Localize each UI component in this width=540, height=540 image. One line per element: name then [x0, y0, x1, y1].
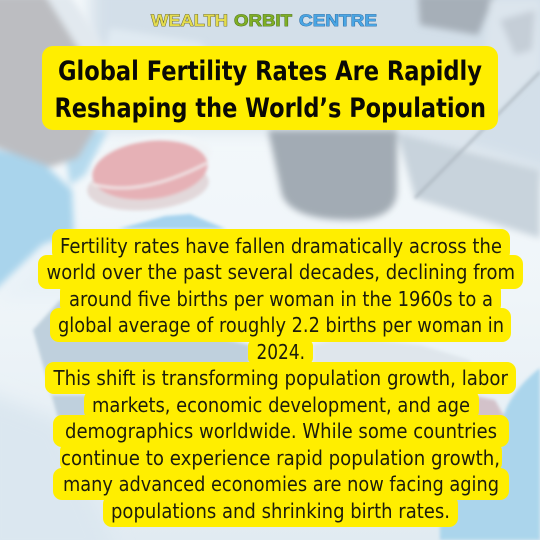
paragraph 2: populations and shrinking birth rates.: [111, 499, 450, 523]
paragraph 1: [46, 234, 515, 364]
paragraph 2: [53, 366, 509, 523]
paragraph 2: markets, economic development, and age: [92, 393, 470, 417]
paragraph 1: 2024.: [256, 340, 305, 364]
logo: Wealth Orbit Centre: [151, 11, 377, 30]
body text panel: [38, 229, 523, 527]
logo word: Centre: CENTRE: [299, 11, 377, 30]
paragraph 1: around five births per woman in the 1960s to a: [69, 287, 493, 311]
paragraph 2: continue to experience rapid population growth,: [61, 446, 500, 470]
paragraph 1: Fertility rates have fallen dramatically across the: [60, 234, 502, 258]
logo word: Orbit: ORBIT: [234, 11, 293, 30]
title panel: [42, 46, 498, 130]
paragraph 2: many advanced economies are now facing aging: [63, 472, 499, 496]
paragraph 2: demographics worldwide. While some countries: [65, 419, 497, 443]
logo word: Wealth: WEALTH: [151, 11, 228, 30]
paragraph 2: This shift is transforming population growth, labor: [53, 366, 509, 390]
